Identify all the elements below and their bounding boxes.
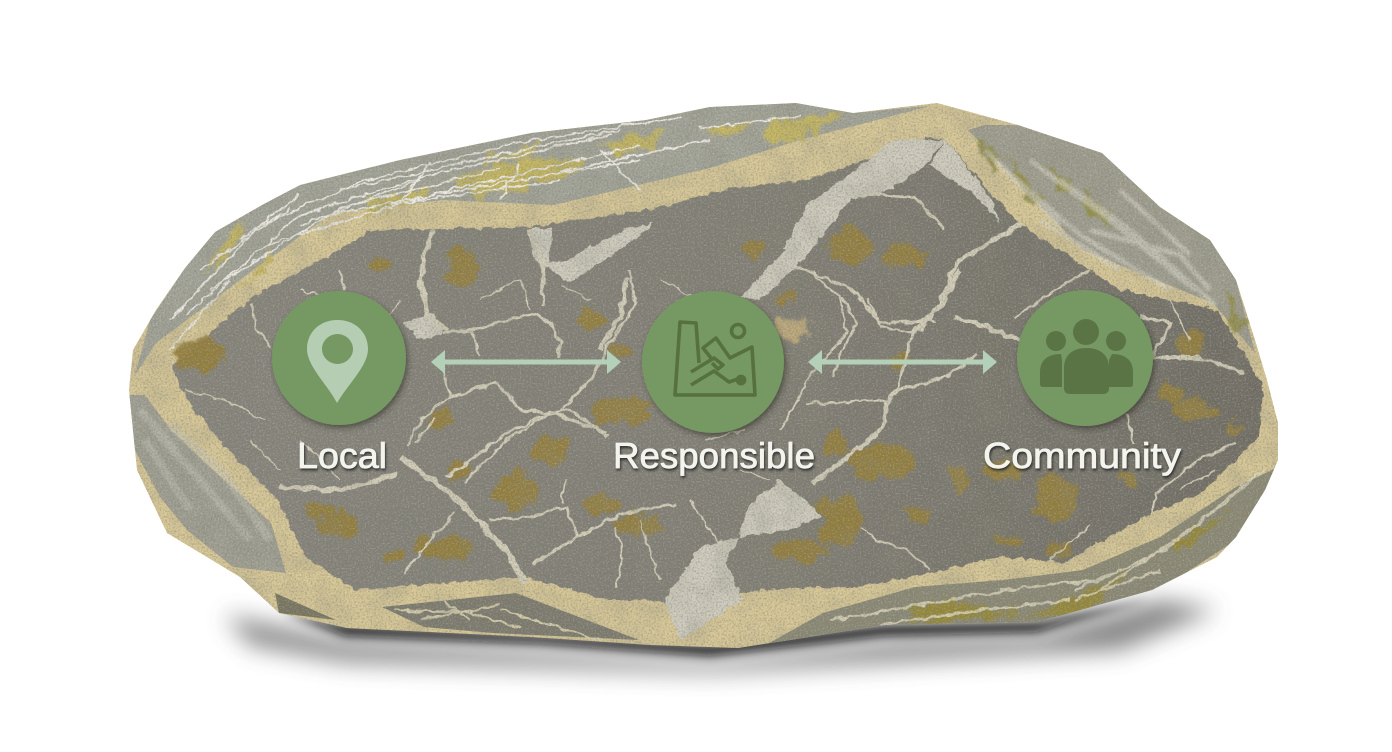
right facet [968,125,1255,353]
icon circle: Community [1017,290,1153,426]
icon: factory and falling figure [675,322,755,395]
rock [120,95,1290,655]
lower-middle facet [382,593,639,640]
infographic: rock with three linked values [129,103,1278,690]
icon circle: Local [272,291,406,425]
mottling and grain [120,95,1290,655]
node: Responsible [613,291,815,476]
arrow: Local to Responsible [431,350,621,374]
lower-left facet [129,395,286,573]
icon circle: Responsible [642,291,784,433]
ground shadow [225,599,1217,672]
veins [185,193,1244,587]
label: Local: Local [297,435,387,476]
icon: map pin [307,320,368,403]
rock base and tan band [120,95,1290,655]
top facet [120,95,1290,655]
icon: group of people [1040,319,1133,394]
node: Community [983,290,1181,476]
lower-right facet [760,467,1280,648]
front face gray stone [171,137,1263,612]
arrow: Responsible to Community [808,350,997,374]
pale vein patches [404,140,1000,640]
node: Local [272,291,406,476]
ochre blotches [175,227,1244,563]
label: Community: Community [983,435,1181,476]
label: Responsible: Responsible [613,435,815,476]
